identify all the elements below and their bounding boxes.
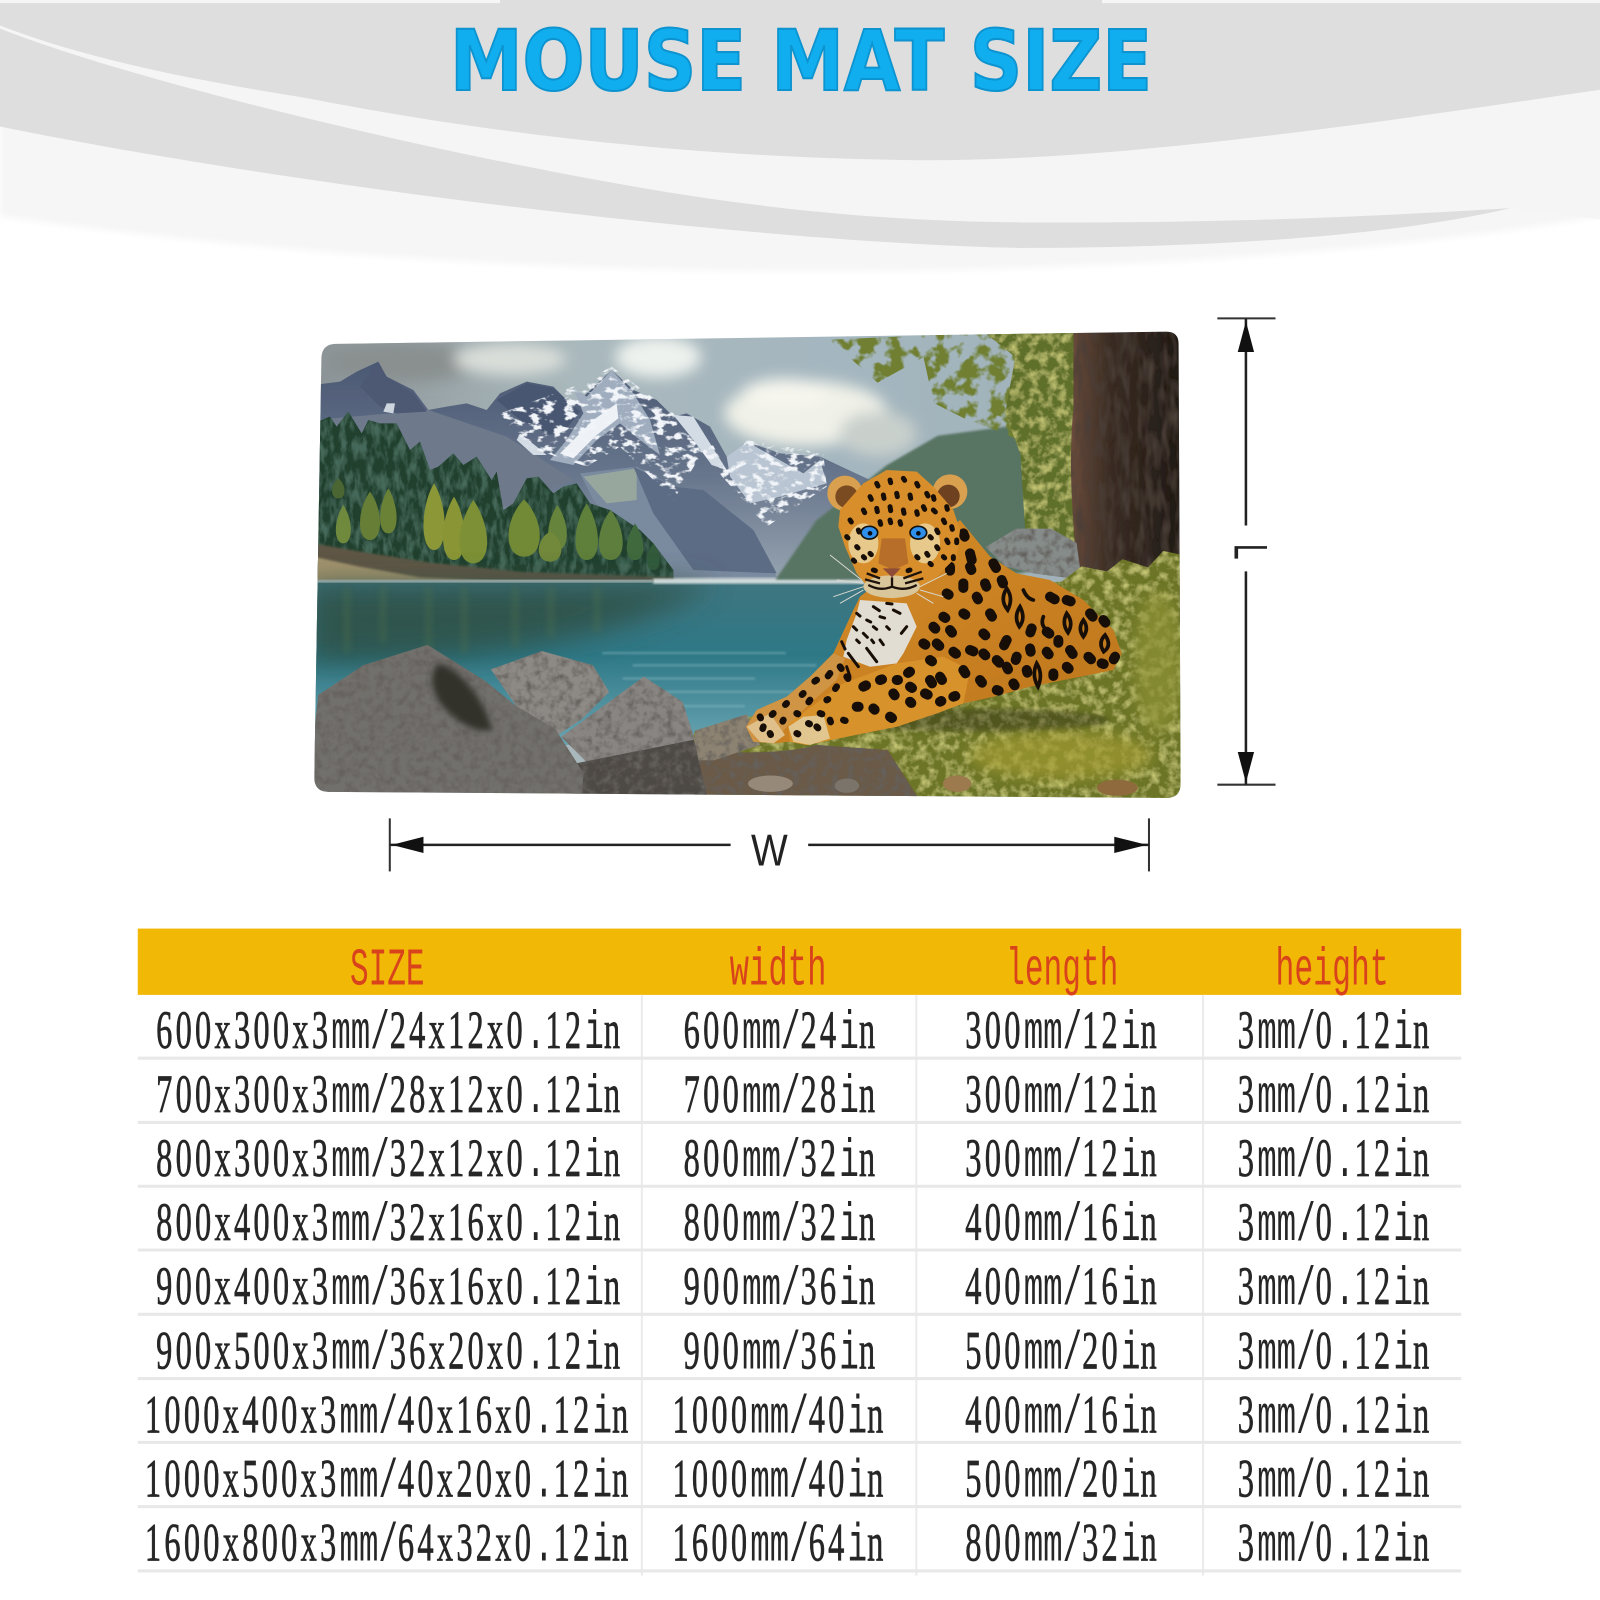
row 4 xyxy=(156,1192,1432,1257)
leopard xyxy=(746,470,1122,745)
table header: SIZE xyxy=(350,941,424,1001)
row 9 xyxy=(145,1512,1432,1578)
row 9: 800mm/32in xyxy=(965,1512,1160,1578)
row 7: 3mm/0.12in xyxy=(1238,1384,1432,1449)
row 5 xyxy=(156,1256,1432,1321)
row 5: 3mm/0.12in xyxy=(1238,1256,1432,1321)
row 6: 900mm/36in xyxy=(684,1320,878,1385)
lake xyxy=(314,562,866,745)
leopard eyes xyxy=(861,526,927,539)
tree canopy and trunk xyxy=(830,327,1184,622)
snow speckle xyxy=(500,367,827,527)
row 1 xyxy=(156,999,1432,1065)
row 7: 1000x400x3mm/40x16x0.12in xyxy=(145,1384,632,1449)
row 1: 600x300x3mm/24x12x0.12in xyxy=(156,999,623,1065)
row 6: 500mm/20in xyxy=(965,1320,1160,1385)
leopard nose and muzzle xyxy=(863,538,923,598)
front leg and arm xyxy=(746,653,970,745)
table header: height xyxy=(1276,941,1389,1001)
row 7: 1000mm/40in xyxy=(672,1384,887,1449)
row 2: 700mm/28in xyxy=(684,1064,878,1129)
row 5: 900x400x3mm/36x16x0.12in xyxy=(156,1256,623,1321)
grass and ground xyxy=(663,551,1189,806)
row 7: 400mm/16in xyxy=(965,1384,1160,1449)
row 3: 300mm/12in xyxy=(965,1128,1160,1193)
row 8: 1000mm/40in xyxy=(672,1448,887,1514)
row 8: 1000x500x3mm/40x20x0.12in xyxy=(145,1448,632,1514)
header background swooshes xyxy=(0,0,1600,271)
table header: width xyxy=(730,941,827,1001)
dark conifers xyxy=(313,412,673,581)
row 7 xyxy=(145,1384,1432,1449)
leopard body xyxy=(746,520,1122,745)
leopard cheek patches xyxy=(848,523,940,563)
dimension W: horizontal arrow xyxy=(390,818,1149,875)
row 8: 500mm/20in xyxy=(965,1448,1160,1514)
row 4: 3mm/0.12in xyxy=(1238,1192,1432,1257)
leopard shadow xyxy=(830,709,1110,731)
dimension W: horizontal arrow: W xyxy=(751,824,788,875)
mountains and forest xyxy=(313,362,870,582)
leopard head xyxy=(838,470,960,600)
row 5: 900mm/36in xyxy=(684,1256,878,1321)
rocks xyxy=(306,645,709,806)
title: MOUSE MAT SIZE xyxy=(450,12,1152,110)
clouds xyxy=(327,337,916,456)
dimension L: vertical arrow xyxy=(1217,318,1276,785)
row 3: 3mm/0.12in xyxy=(1238,1128,1432,1193)
size table xyxy=(138,929,1461,1578)
row 4: 800x400x3mm/32x16x0.12in xyxy=(156,1192,623,1257)
background rock behind leopard xyxy=(986,529,1082,580)
leopard spots xyxy=(760,533,1115,735)
shoreline xyxy=(313,543,673,582)
row 2: 300mm/12in xyxy=(965,1064,1160,1129)
row 6 xyxy=(156,1320,1432,1385)
table header: length xyxy=(1006,941,1118,1001)
row 2 xyxy=(156,1064,1432,1129)
leopard chest xyxy=(843,600,917,667)
row 2: 3mm/0.12in xyxy=(1238,1064,1432,1129)
row 3: 800x300x3mm/32x12x0.12in xyxy=(156,1128,623,1193)
row 1: 300mm/12in xyxy=(965,999,1160,1065)
row 9: 3mm/0.12in xyxy=(1238,1512,1432,1578)
olive trees xyxy=(332,478,660,570)
row 4: 800mm/32in xyxy=(684,1192,878,1257)
product image: mouse mat with leopard scene xyxy=(306,327,1194,806)
row 3 xyxy=(156,1128,1432,1193)
hill behind leopard xyxy=(776,423,1031,580)
mountain range xyxy=(313,362,870,580)
table header xyxy=(138,929,1461,1001)
row 5: 400mm/16in xyxy=(965,1256,1160,1321)
row 8 xyxy=(145,1448,1432,1514)
row 4: 400mm/16in xyxy=(965,1192,1160,1257)
row 9: 1600mm/64in xyxy=(672,1512,887,1578)
row 2: 700x300x3mm/28x12x0.12in xyxy=(156,1064,623,1129)
leopard whiskers xyxy=(830,555,947,603)
row 6: 900x500x3mm/36x20x0.12in xyxy=(156,1320,623,1385)
row 8: 3mm/0.12in xyxy=(1238,1448,1432,1514)
row 9: 1600x800x3mm/64x32x0.12in xyxy=(145,1512,632,1578)
dimension L: vertical arrow: L xyxy=(1224,544,1276,560)
row 3: 800mm/32in xyxy=(684,1128,878,1193)
row 6: 3mm/0.12in xyxy=(1238,1320,1432,1385)
leopard head spots xyxy=(847,478,957,571)
row 1: 3mm/0.12in xyxy=(1238,999,1432,1065)
row 1: 600mm/24in xyxy=(684,999,878,1065)
leopard ears xyxy=(827,474,967,511)
